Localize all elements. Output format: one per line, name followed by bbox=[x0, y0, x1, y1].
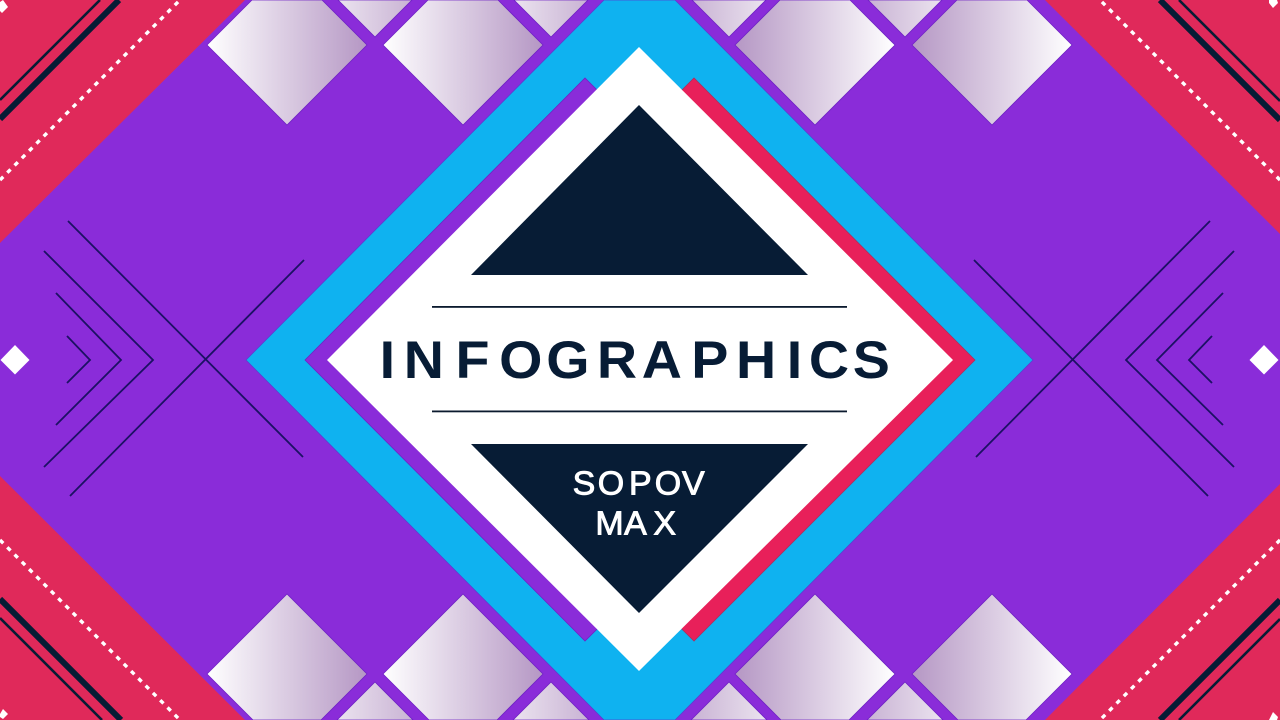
author: first name: SOPOV bbox=[573, 466, 705, 502]
left line ornament bbox=[44, 221, 304, 496]
right line ornament bbox=[974, 221, 1234, 496]
gradient tiles: bottom row bbox=[207, 594, 1072, 720]
red chevron stripe bbox=[640, 78, 975, 641]
top navy triangle bbox=[471, 105, 808, 275]
purple chevron stripe bbox=[305, 78, 640, 641]
icon: right small white diamond bbox=[1250, 345, 1278, 374]
corner panel: bottom right bbox=[1045, 484, 1280, 720]
white central diamond bbox=[327, 47, 953, 671]
divider: lower rule bbox=[432, 410, 847, 412]
corner panel: top left bbox=[0, 0, 245, 243]
corner panel: top right bbox=[1045, 0, 1280, 234]
corner panel: bottom left bbox=[0, 476, 245, 720]
gradient tiles: top row bbox=[207, 0, 1072, 125]
icon: left small white diamond bbox=[0, 345, 30, 374]
title: INFOGRAPHICS bbox=[380, 330, 890, 390]
blue diamond bbox=[246, 0, 1033, 720]
divider: upper rule bbox=[432, 306, 847, 308]
bottom navy triangle bbox=[471, 444, 808, 613]
author: last name: MAX bbox=[595, 506, 676, 542]
